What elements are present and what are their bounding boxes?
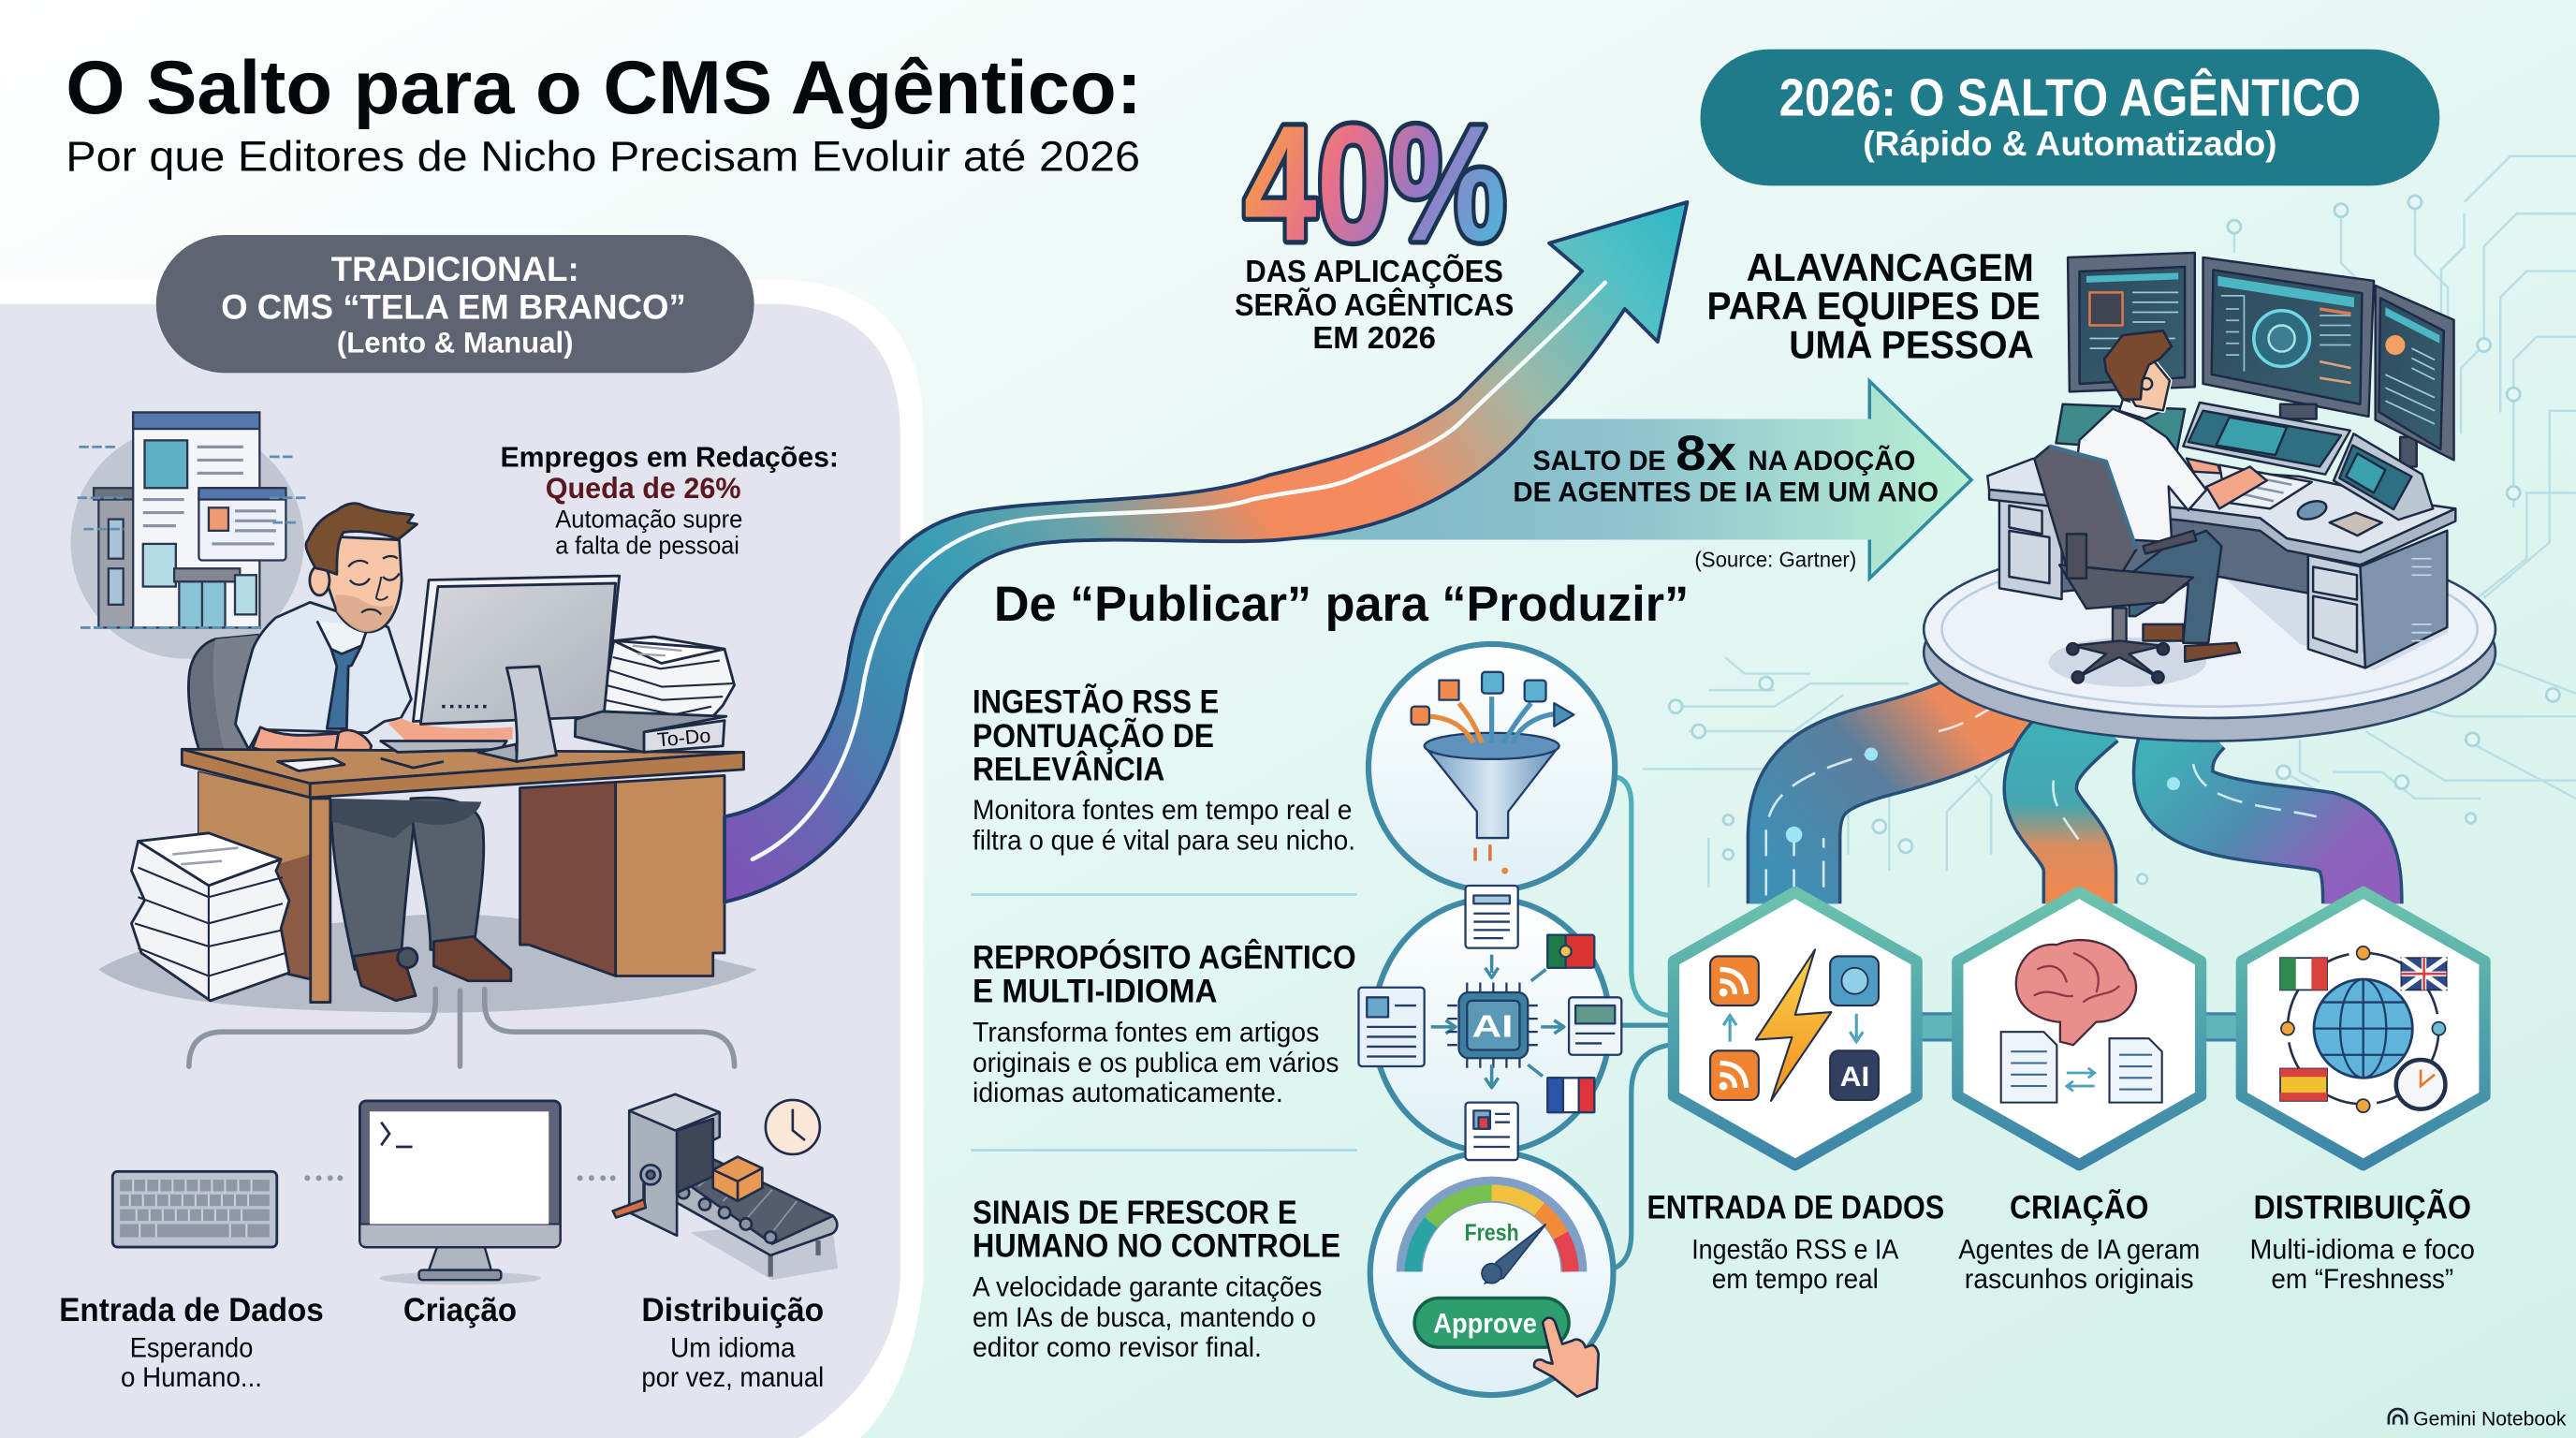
labels: automated steps: ENTRADA DE DADOS bbox=[1647, 1189, 1944, 1225]
text block: multi-language: REPROPÓSITO AGÊNTICO bbox=[973, 938, 1356, 976]
labels: automated steps: Agentes de IA geram bbox=[1958, 1234, 2200, 1265]
bracket connectors bbox=[189, 990, 735, 1066]
stat: newsroom jobs: Queda de 26% bbox=[546, 471, 741, 505]
text block: multi-language: E MULTI-IDIOMA bbox=[973, 974, 1218, 1010]
labels: automated steps: DISTRIBUIÇÃO bbox=[2254, 1189, 2471, 1225]
text block: freshness: A velocidade garante citações bbox=[973, 1272, 1322, 1303]
text block: freshness bbox=[973, 1195, 1340, 1363]
circle chain bbox=[1368, 644, 1615, 1395]
labels: manual steps: por vez, manual bbox=[641, 1362, 824, 1393]
stat: newsroom jobs: a falta de pessoai bbox=[555, 530, 739, 559]
connectors: circles to hexagon bbox=[1613, 777, 1669, 1269]
platform bbox=[1924, 540, 2496, 741]
icon: newsroom building with web pages bbox=[71, 413, 305, 659]
subtitle: Por que Editores de Nicho Precisam Evoluir até 2026 bbox=[66, 133, 1140, 181]
icon: AI repurposing hub: AI bbox=[1472, 1009, 1513, 1044]
heading: one-person leverage: UMA PESSOA bbox=[1789, 323, 2034, 367]
text block: RSS ingestion: RELEVÂNCIA bbox=[973, 751, 1164, 788]
icon: AI repurposing hub bbox=[1358, 886, 1621, 1160]
text block: RSS ingestion: INGESTÃO RSS E bbox=[973, 684, 1219, 721]
labels: manual steps: Um idioma bbox=[670, 1333, 796, 1364]
labels: manual steps: Distribuição bbox=[641, 1292, 824, 1328]
labels: automated steps: em “Freshness” bbox=[2271, 1264, 2453, 1295]
text: 8x jump bbox=[1513, 426, 1939, 507]
icon: keyboard bbox=[112, 1171, 277, 1247]
stat: 40 percent: DAS APLICAÇÕES bbox=[1245, 254, 1503, 289]
hexagon: data input: AI bbox=[1840, 1062, 1869, 1093]
ribbons: platform to hexagons bbox=[1766, 692, 2363, 903]
dotted link bbox=[304, 1175, 616, 1181]
text: 8x jump: 8x bbox=[1676, 426, 1736, 481]
text block: freshness: SINAIS DE FRESCOR E bbox=[973, 1195, 1297, 1231]
labels: manual steps: Criação bbox=[403, 1292, 517, 1328]
circuit nodes bbox=[1669, 196, 2559, 884]
text block: freshness: HUMANO NO CONTROLE bbox=[973, 1228, 1340, 1265]
labels: automated steps: Ingestão RSS e IA bbox=[1691, 1234, 1898, 1265]
illustration: tired man at desk bbox=[98, 504, 757, 1013]
text block: RSS ingestion: PONTUAÇÃO DE bbox=[973, 718, 1214, 755]
pill: traditional heading: TRADICIONAL: bbox=[331, 250, 579, 288]
text: 8x jump: NA ADOÇÃO bbox=[1748, 445, 1915, 477]
hexagon: data input bbox=[1674, 892, 1917, 1165]
labels: manual steps: Esperando bbox=[130, 1333, 253, 1364]
watermark: Gemini Notebook bbox=[2413, 1409, 2567, 1431]
icon: freshness gauge bbox=[1410, 1190, 1573, 1284]
heading: one-person leverage bbox=[1707, 245, 2041, 367]
source note: (Source: Gartner) bbox=[1694, 547, 1856, 571]
labels: manual steps bbox=[59, 1292, 824, 1393]
panel: traditional CMS bbox=[0, 279, 923, 1438]
text block: freshness: editor como revisor final. bbox=[973, 1332, 1262, 1363]
icon: RSS funnel bbox=[1412, 672, 1573, 874]
stat: newsroom jobs bbox=[500, 440, 839, 559]
hexagon bridges bbox=[1919, 1014, 2239, 1040]
arrow: growth curve bbox=[724, 202, 1687, 902]
labels: automated steps: em tempo real bbox=[1712, 1264, 1879, 1295]
title: O Salto para o CMS Agêntico: bbox=[66, 46, 1142, 130]
stat: 40 percent: 40% bbox=[1244, 92, 1506, 275]
text block: RSS ingestion: Monitora fontes em tempo real e bbox=[973, 795, 1352, 826]
text: 8x jump: DE AGENTES DE IA EM UM ANO bbox=[1513, 477, 1939, 507]
pill: 2026 heading: 2026: O SALTO AGÊNTICO bbox=[1779, 68, 2361, 127]
labels: automated steps bbox=[1647, 1189, 2475, 1295]
heading: one-person leverage: ALAVANCAGEM bbox=[1747, 245, 2034, 289]
stat: 40 percent: SERÃO AGÊNTICAS bbox=[1235, 287, 1514, 323]
hexagon: creation bbox=[1957, 892, 2201, 1165]
stat: newsroom jobs: Empregos em Redações: bbox=[500, 440, 839, 473]
labels: manual steps: Entrada de Dados bbox=[59, 1292, 324, 1328]
arrow: 8x adoption bbox=[1290, 381, 1971, 579]
stat: 40 percent: EM 2026 bbox=[1312, 321, 1436, 356]
heading: one-person leverage: PARA EQUIPES DE bbox=[1707, 284, 2041, 328]
heading: publish to produce: De “Publicar” para “Produzir” bbox=[994, 577, 1689, 632]
pill: traditional heading bbox=[156, 235, 754, 373]
circuit board pattern bbox=[1643, 156, 2576, 888]
text block: RSS ingestion: filtra o que é vital para seu nicho. bbox=[973, 825, 1355, 856]
text block: RSS ingestion bbox=[973, 684, 1355, 856]
stat: 40 percent bbox=[1235, 92, 1514, 356]
pill: traditional heading: (Lento & Manual) bbox=[337, 325, 574, 359]
text block: multi-language: idiomas automaticamente. bbox=[973, 1078, 1283, 1108]
labels: automated steps: Multi-idioma e foco bbox=[2250, 1234, 2475, 1265]
hexagon: distribution bbox=[2242, 892, 2485, 1165]
text block: multi-language: originais e os publica em vários bbox=[973, 1048, 1339, 1078]
labels: manual steps: o Humano... bbox=[121, 1362, 262, 1393]
illustration: tired man at desk: To-Do bbox=[656, 726, 711, 752]
text block: freshness: em IAs de busca, mantendo o bbox=[973, 1302, 1316, 1333]
text block: multi-language bbox=[973, 938, 1356, 1108]
labels: automated steps: rascunhos originais bbox=[1965, 1264, 2194, 1295]
illustration: operator at agentic workstation bbox=[1987, 253, 2455, 683]
button: approve with hand bbox=[1414, 1298, 1599, 1397]
button: approve with hand: Approve bbox=[1433, 1308, 1537, 1339]
pill: 2026 heading: (Rápido & Automatizado) bbox=[1863, 125, 2277, 163]
pill: 2026 heading bbox=[1701, 50, 2439, 185]
pill: traditional heading: O CMS “TELA EM BRANCO” bbox=[221, 287, 686, 326]
labels: automated steps: CRIAÇÃO bbox=[2010, 1189, 2148, 1225]
stat: newsroom jobs: Automação supre bbox=[555, 504, 742, 533]
text block: multi-language: Transforma fontes em artigos bbox=[973, 1018, 1319, 1049]
icon: freshness gauge: Fresh bbox=[1465, 1221, 1519, 1246]
icon: blank screen monitor bbox=[359, 1101, 561, 1284]
icon: manual conveyor bbox=[613, 1094, 838, 1280]
text: 8x jump: SALTO DE bbox=[1532, 446, 1666, 477]
